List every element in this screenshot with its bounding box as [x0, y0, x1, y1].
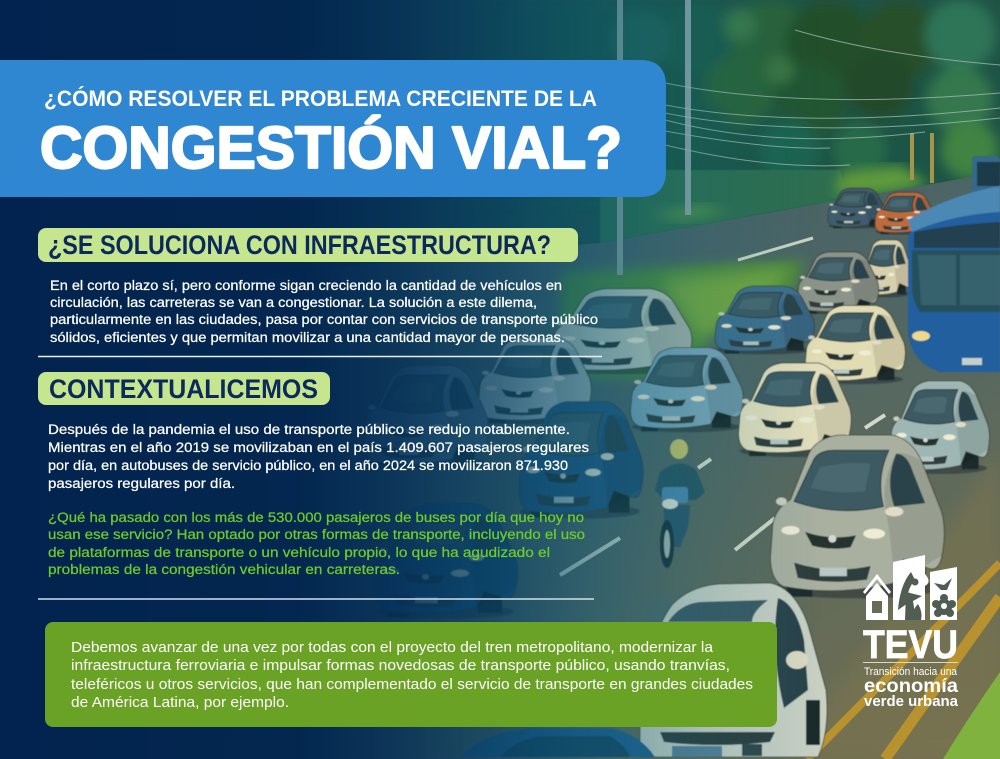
paragraph: context: pasajeros regulares por día.	[48, 476, 235, 491]
bus rear	[972, 156, 1000, 192]
car: dim dark	[364, 365, 488, 469]
paragraph: infraestructura: sólidos, eficientes y que permitan movilizar a una cantidad mayor de personas.	[50, 330, 565, 345]
paragraph: context: por día, en autobuses de servicio público, en el año 2024 se movilizaron 871.930	[48, 458, 568, 473]
grass corner	[943, 672, 1000, 759]
lane marks	[738, 238, 813, 260]
flower centre	[941, 603, 947, 609]
car: silver suv	[770, 435, 944, 598]
paragraph: infraestructura: En el corto plazo sí, pero conforme sigan creciendo la cantidad de vehículos en	[50, 278, 562, 293]
callout: green box	[45, 622, 777, 727]
car: dark blue sedan	[519, 402, 643, 519]
road	[0, 172, 1000, 759]
paragraph: infraestructura: particularmente en las ciudades, pasa por contar con servicios de transporte público	[50, 312, 598, 327]
motorcyclist	[655, 439, 705, 568]
logo: economia: economía	[864, 676, 958, 697]
car: white left	[552, 289, 692, 374]
yellow road lines	[807, 563, 1000, 759]
section: context	[38, 372, 589, 577]
icon: central building with figure	[893, 555, 928, 620]
paragraph: infraestructura	[50, 278, 598, 345]
callout: green box: Debemos avanzar de una vez por todas con el proyecto del tren metropolitano, modernizar la	[71, 640, 714, 656]
logo: verde urbana: verde urbana	[864, 693, 959, 710]
logo wordmark: TEVU	[863, 623, 958, 667]
section: infrastructure	[38, 228, 598, 345]
road tint bands	[790, 450, 1000, 759]
callout: green box: infraestructura ferroviaria e impulsar formas novedosas de transporte público, usando tranvías,	[71, 658, 730, 674]
title: first line: ¿CÓMO RESOLVER EL PROBLEMA CRECIENTE DE LA	[44, 86, 597, 111]
paragraph: context	[48, 422, 589, 491]
title banner	[0, 60, 666, 197]
paragraph: context: Mientras en el año 2019 se movilizaban en el país 1.409.607 pasajeros regulares	[48, 440, 589, 455]
car: blue	[715, 286, 814, 354]
icon: right building with bird and flower	[930, 567, 957, 620]
callout: green box: de América Latina, por ejemplo.	[71, 695, 289, 711]
car: cream front	[739, 363, 851, 457]
forest backdrop	[480, 0, 1000, 205]
icon: figure cutout	[898, 572, 922, 620]
car: blue bottom	[462, 728, 655, 757]
bus	[908, 186, 1000, 372]
car: grey	[798, 252, 879, 314]
paragraph: context: Después de la pandemia el uso de transporte público se redujo notablemente.	[48, 422, 570, 437]
car: white foreground	[640, 583, 827, 757]
paragraph: green question	[48, 510, 585, 577]
paragraph: infraestructura: circulación, las carreteras se van a congestionar. La solución a este dilema,	[50, 295, 537, 310]
icon: bird and flower cutout	[932, 578, 956, 617]
paragraph: green question: de plataformas de transporte o un vehículo propio, lo que ha agudizado el	[48, 545, 550, 560]
car: light blue right	[890, 381, 989, 474]
roadside verge	[600, 170, 850, 243]
logo: TEVU	[863, 555, 959, 710]
car: orange	[875, 192, 934, 235]
traffic: cars and bus	[364, 156, 1000, 757]
car: cream back row	[862, 240, 911, 297]
callout: green box: teleféricos u otros servicios, que han complementado el servicio de transporte en grandes ciudades	[71, 677, 753, 693]
car: cream middle	[805, 305, 905, 384]
paragraph: green question: ¿Qué ha pasado con los más de 530.000 pasajeros de buses por día que hoy no	[48, 510, 584, 525]
title: main line: CONGESTIÓN VIAL?	[40, 115, 622, 181]
car: blue rear distant	[828, 188, 885, 229]
icon: house	[863, 574, 891, 620]
poles and wires	[617, 0, 623, 275]
heading pill: contextualicemos: CONTEXTUALICEMOS	[49, 374, 318, 404]
heading pill: infraestructura: ¿SE SOLUCIONA CON INFRAESTRUCTURA?	[48, 230, 551, 260]
grass median	[560, 260, 805, 378]
logo tagline: Transición hacia una	[864, 666, 958, 678]
car: light blue	[631, 348, 743, 432]
car: dim lower left	[374, 504, 518, 619]
paragraph: green question: problemas de la congestión vehicular en carreteras.	[48, 562, 400, 577]
paragraph: green question: usan ese servicio? Han optado por otras formas de transporte, incluyendo el uso	[48, 527, 585, 542]
car: dim white	[479, 338, 591, 424]
